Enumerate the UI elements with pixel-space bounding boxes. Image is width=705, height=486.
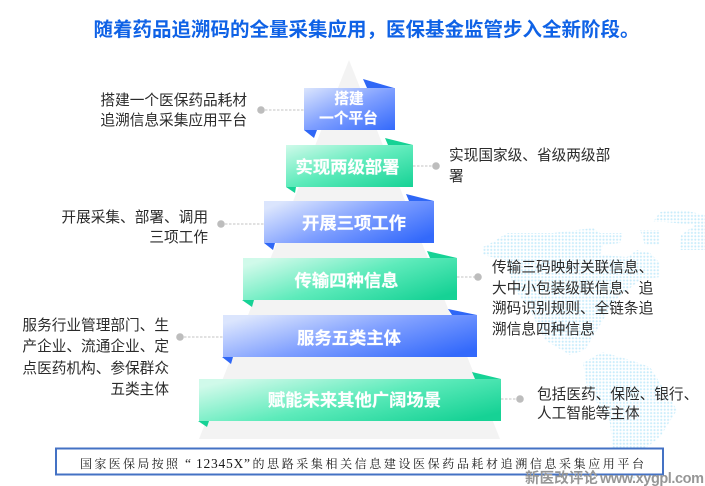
callout: tier 5 description [22, 317, 223, 398]
tier 6: 赋能未来其他广阔场景: 赋能未来其他广阔场景 [268, 390, 441, 410]
tier 2: 实现两级部署 [286, 138, 413, 193]
tier 4: 传输四种信息: 传输四种信息 [295, 270, 398, 290]
tier 1: 搭建一个平台 [304, 79, 395, 138]
callout: tier 2 description: 署 [449, 169, 464, 185]
watermark [525, 469, 704, 486]
callout: tier 4 description: 传输三码映射关联信息、 [492, 259, 653, 276]
tier 2: 实现两级部署: 实现两级部署 [296, 157, 399, 177]
callout: tier 4 description: 溯信息四种信息 [492, 321, 595, 338]
callout: tier 3 description: 三项工作 [149, 229, 208, 246]
callout: tier 1 description [100, 92, 304, 129]
callout: tier 5 description: 五类主体 [110, 381, 169, 398]
pyramid background [199, 60, 500, 439]
callout: tier 1 description: 追溯信息采集应用平台 [100, 111, 247, 129]
callout: tier 5 description: 点医药机构、参保群众 [22, 360, 169, 377]
title: 随着药品追溯码的全量采集应用，医保基金监管步入全新阶段。 [94, 18, 640, 41]
footer caption box: “ [185, 456, 191, 471]
footer caption box: 的思路采集相关信息建设医保药品耗材追溯信息采集应用平台 [252, 456, 644, 471]
background: dotted world map [483, 210, 705, 483]
tier 6: 赋能未来其他广阔场景 [198, 372, 501, 427]
callout: tier 4 description [457, 259, 654, 338]
callout: tier 6 description [501, 386, 698, 422]
callout: tier 6 description: 人工智能等主体 [537, 404, 640, 422]
callout: tier 1 description: 搭建一个医保药品耗材 [100, 92, 247, 109]
callout: tier 2 description [413, 147, 610, 185]
footer caption box [56, 448, 663, 474]
tier 4: 传输四种信息 [242, 251, 457, 307]
callout: tier 4 description: 大中小包装级联信息、追 [492, 280, 654, 297]
tier 5: 服务五类主体: 服务五类主体 [297, 328, 402, 348]
callout: tier 4 description: 溯码识别规则、全链条追 [492, 299, 654, 317]
callout: tier 3 description [61, 209, 264, 246]
tier 3: 开展三项工作: 开展三项工作 [302, 213, 406, 233]
footer caption box: 国家医保局按照 [80, 456, 179, 471]
callout: tier 6 description: 包括医药、保险、银行、 [537, 386, 698, 403]
callout: tier 5 description: 产企业、流通企业、定 [22, 337, 169, 355]
callout: tier 3 description: 开展采集、部署、调用 [61, 209, 208, 226]
tier 1: 搭建一个平台: 一个平台 [319, 109, 378, 127]
tier 5: 服务五类主体 [222, 309, 477, 364]
callout: tier 2 description: 实现国家级、省级两级部 [449, 147, 610, 164]
tier 3: 开展三项工作 [264, 194, 434, 250]
tier 1: 搭建一个平台: 搭建 [334, 90, 364, 108]
footer caption box: 12345X” [196, 456, 250, 471]
callout: tier 5 description: 服务行业管理部门、生 [22, 317, 169, 334]
